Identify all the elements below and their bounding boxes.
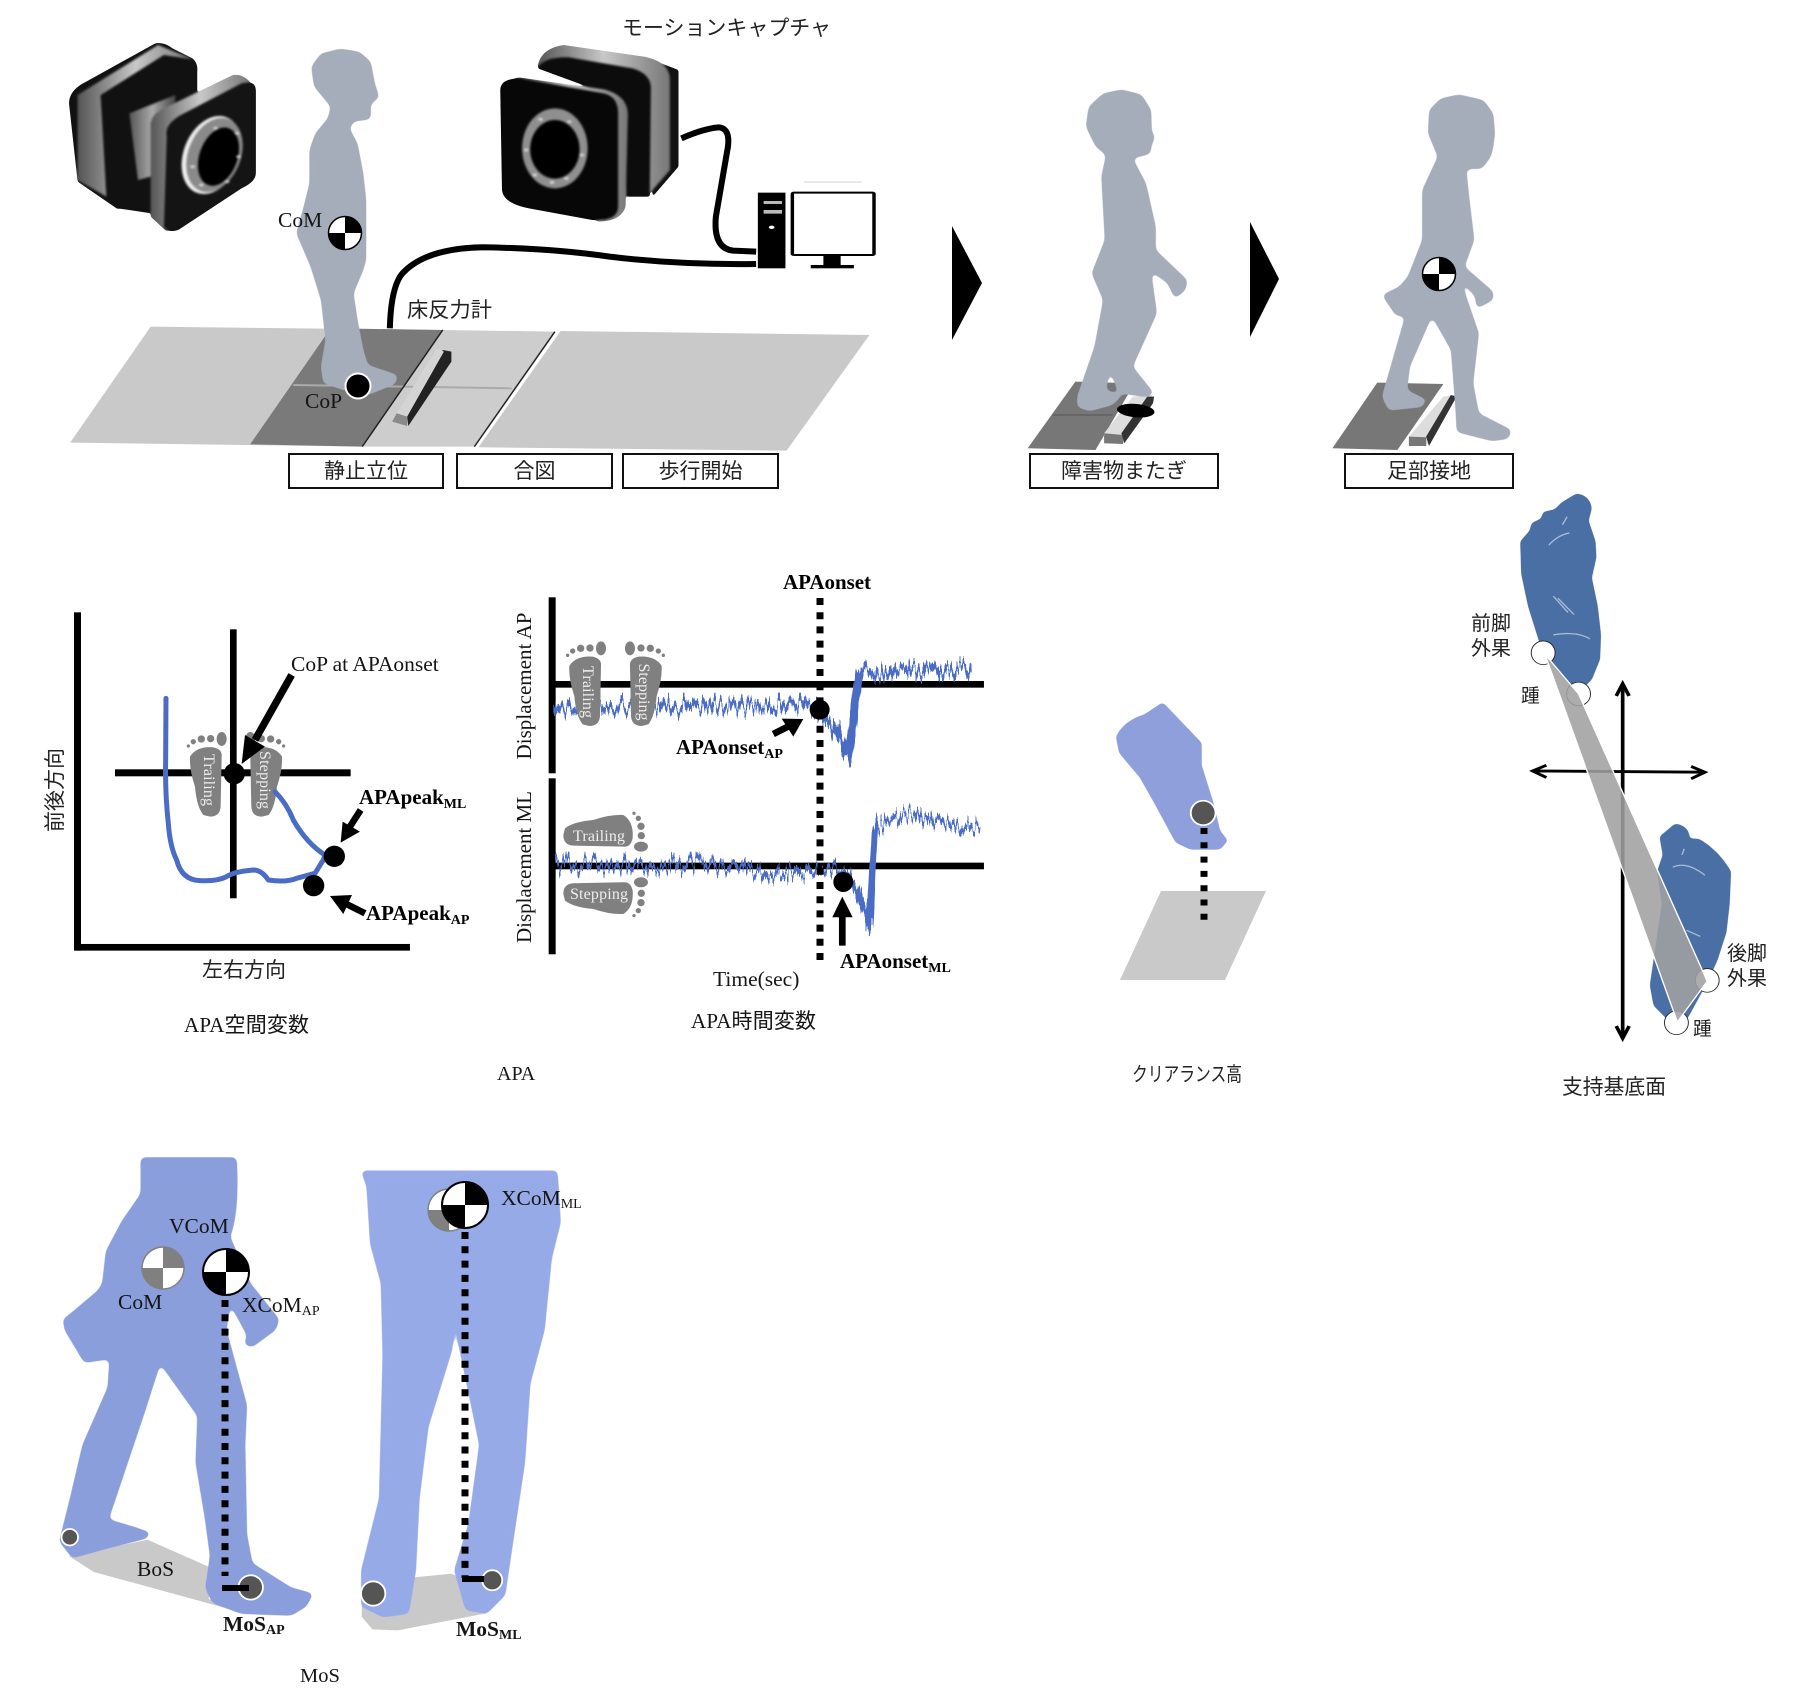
caption: base of support: 支持基底面 (1562, 1076, 1666, 1099)
icon: CoM side (142, 1247, 184, 1289)
label: APApeak AP: AP (451, 913, 470, 928)
icon: XCoM side (203, 1249, 249, 1295)
icon: CoM marker stepping (1422, 258, 1456, 290)
dotted height line (1200, 828, 1208, 923)
base of support polygon (1545, 654, 1707, 1022)
label: APApeak AP: APApeak (366, 901, 451, 925)
label: mediolateral axis: 左右方向 (202, 959, 286, 982)
label: XCoM ML: XCoM (501, 1186, 561, 1210)
box: quiet standing (289, 454, 443, 488)
axis arrows (1533, 684, 1705, 1038)
icon: computer (758, 181, 874, 268)
foot labels: Stepping (635, 664, 652, 720)
box: foot contact: 足部接地 (1387, 460, 1471, 483)
side view: dotted line and margin bar (222, 1300, 249, 1591)
icon: CoP marker (346, 374, 370, 398)
label: MoS AP: AP (266, 1623, 285, 1638)
label: rear ankle: 後脚 (1727, 942, 1767, 965)
foot labels: Trailing (579, 666, 596, 718)
box: cue (457, 454, 612, 488)
label: time: Time(sec) (713, 967, 799, 991)
floor patch (1120, 891, 1266, 980)
arrow: first triangle (952, 226, 982, 340)
icon: left motion capture camera (69, 43, 256, 232)
foot labels (570, 664, 652, 903)
label: motion capture: モーションキャプチャ (622, 17, 831, 40)
icon: stepping foot AP (625, 641, 665, 726)
box: foot contact (1345, 454, 1513, 488)
chart: APA temporal variables (512, 570, 984, 1033)
panel: base of support (1471, 493, 1767, 1099)
label: CoP at APAonset: CoP at APAonset (291, 652, 439, 676)
label: front ankle: 外果 (1471, 637, 1511, 660)
label: CoM: CoM (278, 208, 322, 232)
label: APAonset ML: ML (928, 961, 951, 976)
icon: CoM marker standing (328, 216, 362, 250)
displacement ML trace (555, 813, 980, 923)
foot labels: Trailing (573, 828, 625, 845)
front view: base of support and body (361, 1170, 561, 1630)
icon: stepping foot ML (563, 877, 648, 917)
cables (390, 127, 756, 328)
label: APAonset: APAonset (783, 570, 871, 594)
caption: APA temporal: APA時間変数 (691, 1009, 816, 1033)
caption: APA spatial: APA空間変数 (184, 1013, 309, 1037)
label: front ankle (1471, 612, 1511, 660)
box: obstacle crossing: 障害物またぎ (1061, 460, 1187, 483)
label: APAonset AP: APAonset (676, 735, 764, 759)
caption: clearance: クリアランス高 (1132, 1063, 1242, 1086)
arrow: second triangle (1250, 222, 1279, 337)
chart: APA spatial variables (44, 612, 470, 1037)
obstacle crossing scene (1028, 89, 1188, 450)
top panel: experiment setup (69, 17, 1513, 488)
box: cue: 合図 (514, 460, 556, 483)
box: gait initiation (623, 454, 778, 488)
caption: MoS: MoS (300, 1665, 340, 1687)
foot labels: Stepping (570, 886, 628, 903)
label: XCoM AP: XCoM (242, 1293, 302, 1317)
front view: dotted line and margin bar (462, 1232, 484, 1582)
label: APApeak ML: APApeak (359, 785, 444, 809)
feet (1520, 493, 1731, 1023)
markers and arrows (224, 675, 365, 914)
figure: child standing (296, 49, 398, 395)
label: XCoM ML: ML (561, 1197, 582, 1212)
label: MoS ML: MoS (456, 1617, 499, 1641)
label: stepping: Stepping (256, 751, 273, 809)
label: VCoM: VCoM (169, 1214, 229, 1238)
label: rear ankle (1727, 942, 1767, 990)
axes (549, 597, 984, 954)
label: XCoM AP: AP (302, 1304, 320, 1319)
label: CoM: CoM (118, 1290, 162, 1314)
front view: ankle markers (361, 1570, 502, 1606)
box: obstacle crossing (1030, 454, 1218, 488)
onset dotted line (816, 598, 824, 960)
icon: stepping foot (245, 732, 285, 817)
label: rear heel: 踵 (1693, 1018, 1712, 1040)
label: APApeak ML: ML (444, 797, 466, 812)
icon: CoM front (428, 1189, 470, 1231)
label: front heel: 踵 (1521, 685, 1540, 707)
panel: margin of stability (59, 1157, 582, 1687)
foot contact scene (1332, 94, 1512, 450)
label: trailing: Trailing (200, 754, 217, 806)
icon: trailing foot ML (563, 812, 648, 852)
icon: XCoM front (442, 1182, 488, 1228)
label: front ankle: 前脚 (1471, 612, 1511, 635)
label: APAonset AP: AP (764, 747, 783, 762)
panel: clearance height (1116, 702, 1266, 1086)
label: force plate: 床反力計 (407, 299, 492, 322)
label: rear ankle: 外果 (1727, 967, 1767, 990)
caption: APA: APA (497, 1063, 536, 1085)
label: BoS: BoS (137, 1557, 174, 1581)
axes and crosshair (74, 612, 410, 951)
label: MoS AP: MoS (223, 1612, 266, 1636)
white ankle and heel markers (1531, 641, 1719, 1035)
CoP trajectory (166, 698, 325, 881)
icon: right motion capture camera (500, 45, 678, 222)
label: CoP: CoP (305, 389, 342, 413)
foot (1116, 702, 1228, 850)
label: displacement AP: Displacement AP (512, 612, 536, 760)
label: APAonset ML: APAonset (840, 949, 928, 973)
label: anteroposterior axis: 前後方向 (44, 748, 67, 832)
label: MoS ML: ML (499, 1628, 522, 1643)
side view: base of support and body (59, 1157, 314, 1616)
box: quiet standing: 静止立位 (324, 460, 408, 483)
icon: trailing foot AP (566, 641, 606, 726)
side view: ankle markers (62, 1529, 263, 1600)
icon: trailing foot (187, 732, 227, 817)
label: displacement ML: Displacement ML (512, 791, 536, 943)
onset markers and arrows (773, 700, 853, 946)
displacement AP trace (553, 667, 972, 758)
box: gait initiation: 歩行開始 (658, 460, 742, 483)
walkway with force plate and obstacle (70, 327, 869, 451)
